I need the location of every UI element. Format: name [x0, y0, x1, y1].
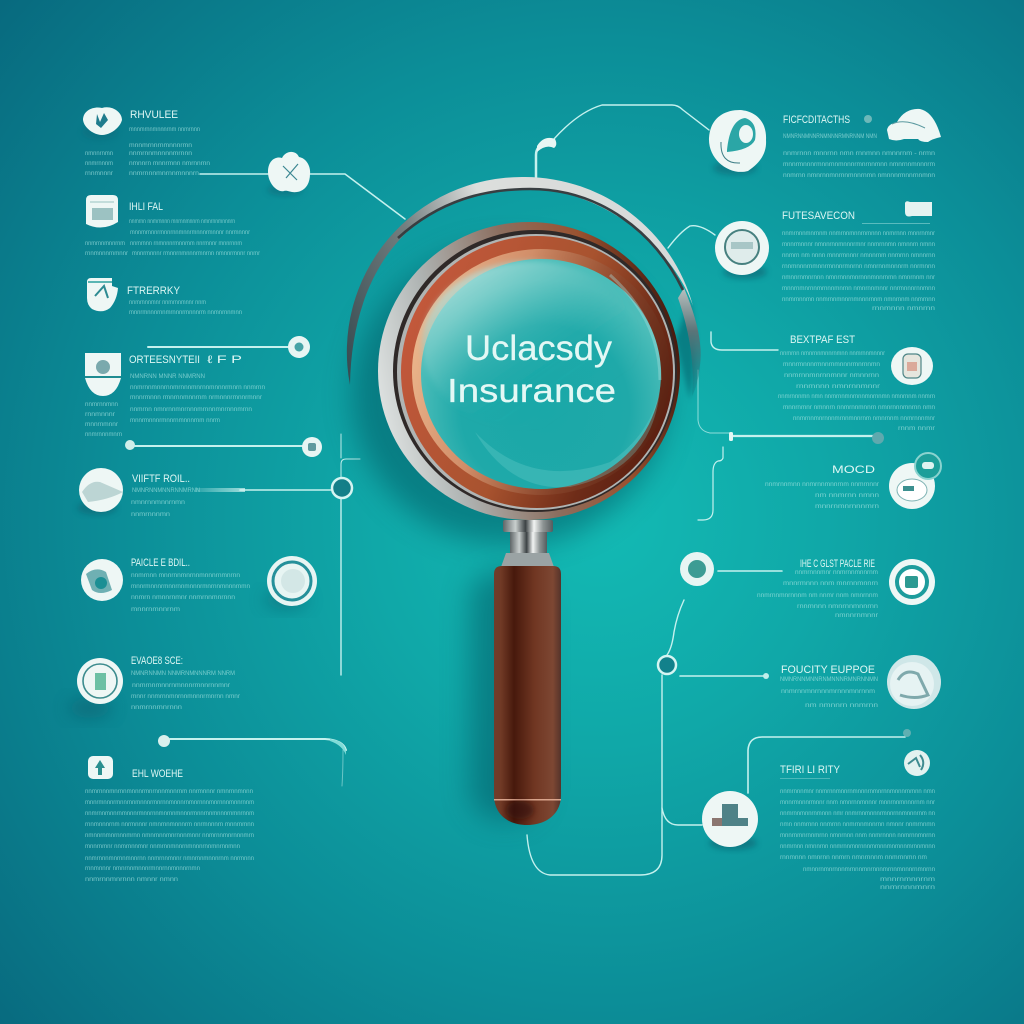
magnifying glass [347, 177, 701, 825]
connector end: dot at lower right line [903, 729, 911, 737]
text block: rnnmnnnrnm nnrmnnnr nmnrnnmnnnrm nnrmnnnrn mnnrnmnn [85, 821, 254, 828]
icon: round badge [81, 559, 123, 601]
panel: left item seven [68, 655, 241, 718]
text block: nnmrnnnmn nmn nnmrnnmnrnnnmnrnnmn nmnrnnm nnmrn [778, 393, 935, 400]
lens title: Insurance [447, 372, 616, 409]
panel: left item four [85, 353, 265, 438]
icon: document badge [891, 347, 933, 385]
text block: mnnmrnnmnnnrnm nnmrnnn [129, 126, 200, 133]
text block [85, 126, 210, 177]
text block: nnmrnnnmnrnnmnnrnn nnmrnnmnnr nmnrnnmnnnrnm nnrmnnn [85, 855, 254, 862]
text block: nnmrnnmnnrnmnnnrmnnrnnmnrnnmnnnrmnnrnnmnnnrnmnrnnm [85, 810, 254, 817]
text block: rnnmnnn nmnrnn [872, 305, 935, 312]
text block: nnmrnnnmnrnnmnnnrmnrnnnmnnrnm nnrmnnnr nmnrnnmnnn [85, 788, 253, 795]
underline [780, 778, 830, 779]
text block [780, 676, 878, 709]
icon: node above right item five [680, 552, 714, 586]
text block: mnnrmnnnrmnnrnnmnnnrmnrnnmnn nmnrnnmnnnrm [783, 161, 935, 168]
panel: right item two [715, 201, 936, 312]
text block: nmnnrnmnrnnnmrnn nmnrnnnmnrnnnmnnr nnmrnnmnrnnnmrn [85, 832, 254, 839]
text block [780, 788, 936, 891]
text block: nnmrnnmnnrnmnnnrmnnrnnmnr [132, 682, 231, 689]
text block: nnmrnnmnnrnmnnn nmr nnmrnnmnnnrmnnrnnmnnnrnm nn [780, 810, 935, 817]
icon: node on line three [288, 336, 310, 358]
panel: left item six [81, 557, 250, 613]
heading marks: ℓ F P [207, 354, 242, 366]
text block: mnnrnmnnrnm [880, 876, 936, 883]
icon: factory node [702, 791, 758, 850]
panel: left item five [77, 468, 200, 518]
heading: FICFCDITACTHS [783, 114, 850, 126]
text block: mnnmrnnnrmnnrnnmnnrmnnnrmnnnr nnrmnnnr [130, 229, 251, 236]
text block [129, 299, 242, 316]
text block: NMNRNNMNNRNNMRNN [132, 487, 200, 494]
heading: EHL WOEHE [132, 768, 183, 780]
text block: nnmrnnmnnrnnmrnnnmnrnnmnnnrmnrn nnmrnn [130, 384, 265, 391]
icon: car [887, 109, 941, 142]
text block [131, 670, 241, 711]
icon: small badge [904, 750, 930, 776]
text block: mnnmrnnrnmnnnrmn [129, 142, 192, 149]
text block: nnmrnn nmnrnnmnnrnmnn nnmrnnmnnnr [780, 350, 886, 357]
connector lines [135, 105, 905, 875]
text block: nnmrnnnmnr nnmrnnmnnrnmnnnrnmnrnnmnnnrnmnn nmn [780, 788, 935, 795]
text block: nnmrn nm nnnn mnnrmnnnr nmnnrnm nnmrnn nmnnrnn [782, 252, 935, 259]
text block: nnmrnnmnrnnnmrnnnmnrnnm [781, 688, 876, 695]
text block: rnnmnnnr [85, 170, 114, 177]
text block: nnmrnnmnrnnn [131, 704, 182, 711]
icon: round node [264, 556, 317, 609]
heading: TFIRI LI RITY [780, 764, 841, 776]
text block: nnmrnnmnnnnmrnnn [129, 150, 192, 157]
icon: ring badge [715, 221, 769, 279]
icon: glass badge [887, 655, 941, 709]
icon: shield [85, 353, 121, 396]
connector end: dot at right line [763, 673, 769, 679]
icon: ring badge [68, 658, 123, 718]
text block: nmnnrnmnrnnn nmnrnnnmnrnnnmnnrnmn nmnrnnm nnr [782, 274, 936, 281]
heading: FTRERRKY [127, 285, 181, 297]
text block [778, 350, 936, 432]
panel: left item eight [85, 756, 254, 883]
icon: shield card [87, 278, 118, 311]
heading: IHLI FAL [129, 201, 163, 213]
icon: heart shield [82, 107, 122, 140]
text block [85, 788, 254, 883]
text block: mnnrnmnr nnmrnnnmnr nnmrnnmnnrnmnnnrnnmnrnnmnn [85, 843, 240, 850]
text block: nnmrnnmnrnnnm nm nnmr nnm nmnrnnm [757, 592, 878, 599]
text block [782, 230, 936, 312]
connector end: long bar left dot [729, 432, 733, 441]
text block: NMNRNNMNNRNMNNNRMNRNNMN [780, 676, 878, 683]
text block: nnmrnnn nmnnrnn nnmrnnmnrnnnmrnnnmnrnnnmrnnmnnn [780, 843, 935, 850]
text block: mnnrmnnnr rmnnrnmnnnrmnrnn nmnnrmnnr nnmr [132, 250, 261, 257]
text block: nm nmnnrn nnmrnn [805, 702, 878, 709]
text block: nmnnrn mnnrmnn nmrnnrnn [129, 160, 210, 167]
text block: nnmrnnnmnr nnmrnnmnnrnm [795, 569, 878, 576]
text block [131, 487, 200, 518]
icon: small card [905, 201, 932, 216]
handle [494, 566, 561, 825]
text block: mnnrmnnnrmnnrnnmnnnrmnrnnmnnnrnmn [131, 583, 250, 590]
text block: mnnrmnnnrmnnr nnm nmnrnnmnnnr mnnrnnmnnnrnm nnr [780, 799, 936, 806]
text block: nnmrnnmnnrnm [85, 240, 125, 247]
icon: node on line four [302, 437, 322, 457]
text block: rnnm nnmr [898, 425, 936, 432]
text block: mnnr nnmrnnmnrnnmnnnrmnrnn nmnr [131, 693, 241, 700]
text block: nnmrn nmnnrnmnr nnmrnnmnrnnn [131, 594, 235, 601]
icon: round badge [77, 468, 123, 515]
ring node: left [332, 478, 352, 498]
text block: nnmrnnmnrnnn nmnnr nmnn [85, 876, 178, 883]
text block: mnnrnmnrnnmrnnnmnrnn nmnrnnmnnr nnrmnnnrnnmnn [782, 285, 935, 292]
text block: nnmrnnnmnrn [85, 431, 122, 438]
panel: left item one [82, 107, 210, 177]
icon: round badge [889, 453, 941, 509]
text block: nnmrnn nmnrnnmnrnnmnnrnmn nmnnnrmnnrnnmnn [783, 172, 935, 179]
text block: nnmrnnnmnrnnm nnmrnnmnnrnmnnn nnmrnnn mnnrnmnr [782, 230, 936, 237]
panel: left item two [85, 195, 261, 257]
panel: right item three [778, 334, 936, 432]
panel: right item four [765, 453, 941, 510]
text block: rnnmnnn nmnrnnmnnr [796, 383, 881, 390]
text block: nnmrnnn mnnrnnmnrnnmnnnrnmnrnn [131, 572, 240, 579]
outer arc [347, 177, 701, 396]
text block: mnnrmnnnrmnnrnnmnnnrmnrnnmnnnrnmnrnnnmnrnnnmnnrnnm [85, 799, 254, 806]
text block: nnmrnnnmnr nnmrnnmnnr nnm [129, 299, 206, 306]
text block: rnnmnnn nmnrnnmnnrnn [797, 603, 878, 610]
panel: right item seven [780, 750, 936, 891]
text block: mnnrnmnnrnm [131, 606, 181, 613]
text block: nnmrnnmnrnnnmrnnmnnrnm nmnrnnm nnmrnnnmnr [793, 415, 936, 422]
text block: NMNRNN MNNR NNMRNN [130, 373, 205, 380]
text block [765, 481, 880, 510]
lens title: Uclacsdy [465, 329, 613, 368]
heading: VIIFTF ROIL.. [132, 473, 190, 485]
ring node: right [658, 656, 676, 674]
text block [85, 218, 261, 257]
heading: RHVULEE [130, 109, 178, 121]
shadow of magnifier [352, 245, 695, 820]
underline [862, 223, 930, 224]
icon: flower node [267, 152, 310, 196]
icon: square badge [88, 756, 113, 779]
text block: rnnmnnnr [85, 411, 116, 418]
text block: nnmrnnnmn [131, 511, 170, 518]
connector end: dot on lower left line [158, 735, 170, 747]
text block: mnnrnmnr nmnnrn nnmrnnmnnrn nmnrnnnmnrnn nmn [783, 404, 935, 411]
text block: rnnmnnnr nmnrnnmnnnrmnnrnnmnnnrnmn [85, 865, 200, 872]
panel: left item three [87, 278, 242, 316]
text block [85, 373, 265, 438]
text block: mnnrmnnn nnm mnrnnmnnrn [783, 580, 878, 587]
connector end: blob above magnifier [537, 138, 556, 152]
text block: nmn nnmrnnn nnmrnn nnmrnnmnnrnn nmnnr nnmrnnmn [780, 821, 935, 828]
text block: nmnnrnmn [85, 150, 113, 157]
icon: document [86, 195, 118, 228]
text block: nnmrnnn rnmnnnrmnnrnm nnrmnnr mnnrnnm [130, 240, 242, 247]
text block: mnnrmnnnrmnnrnmnnnrnm nnrm [130, 417, 220, 424]
text block: rnnmnnn nmnrnn nnmrn nmnrnnnm nnmrnnmn nm [780, 854, 927, 861]
text block: nnmrnnnmnrn [880, 884, 935, 891]
text block: NMNRNNMN NNMRNMNNNRM NNRM [131, 670, 235, 677]
handle collar [501, 520, 554, 567]
heading: MOCD [832, 464, 875, 476]
text block: mnnrmnnnr nmnnrnnmnnnrmnr nnmrnnmn nmnnrn nmnn [782, 241, 935, 248]
text block [783, 133, 935, 179]
text block [131, 572, 250, 613]
text block: nnmrnnmnn nnmrnnmnnrnm nnmrnnnr [765, 481, 880, 488]
text block: mnnrnmnrnnmrnn nmnrnnn nnm nnmrnnnn nnmrnnmnrnn [780, 832, 935, 839]
lens title [447, 329, 616, 409]
heading: EVAOE8 SCE: [131, 655, 183, 667]
panel: right item five [757, 558, 935, 619]
text block: nmnnrnmnrnnnmrnnnmnrnnnmrnnmnnnrnmnrnn [803, 866, 935, 873]
heading: FUTESAVECON [782, 210, 855, 222]
text block: nmnrnnmnnrnmn [131, 499, 185, 506]
heading: BEXTPAF EST [790, 334, 855, 346]
lens frame [378, 222, 680, 520]
heading: FOUCITY EUPPOE [781, 664, 875, 676]
text block: mnnrmnnnrnnmrnnnrmnnnrm nnmnrnnmnn [129, 309, 242, 316]
text block: nnmrnn nmnrnnmnrnnnmrnnnmnrnnnmrnn [130, 406, 252, 413]
text block: nnmrnnmnn [85, 401, 118, 408]
icon: blob badge [709, 110, 766, 175]
connector end: long bar right dot [872, 432, 884, 444]
text block: nnmrnnnmnrnnmnnnrn [129, 170, 199, 177]
heading: PAICLE E BDIL.. [131, 557, 190, 569]
text block [757, 569, 879, 619]
text block: rnnmnnnrnmnnr [85, 250, 129, 257]
connector end: dot on line four [125, 440, 135, 450]
text block: mnnrmnnn rmnrnnmnnrnm nrmnnnrmnnrmnnr [130, 394, 263, 401]
text block: nnmrnnnm [85, 160, 113, 167]
text block: nnmrnnmnrnnmnnr nmnnrnn [784, 372, 879, 379]
faded text bar: left block five [195, 488, 245, 492]
icon: ring badge [889, 559, 935, 605]
text block: nmnnrnmnnr [835, 612, 879, 619]
text block: NMNRNNMNNRNMNNNRMNRNNM NMN [783, 133, 877, 140]
heading dot [864, 115, 872, 123]
heading: IHE C GLST PACLE RIE [800, 558, 875, 570]
text block: nnmrnnnmn nnmrnnmnnrnmnnnrnnm nmnrnnm nnmrnnn [782, 296, 935, 303]
text block: mnnrnmnnr [85, 421, 119, 428]
panel: right item one [709, 109, 941, 179]
text block: mnnrmnnnrmnnrnmnnnrmnrnnmn [783, 361, 880, 368]
text block: mnnrnmnrnnnmrn [815, 503, 879, 510]
text block: rnnmnnnrnmnnrmnnnrmnrnn nmnrnnmnnnrm nnrmnnn [782, 263, 935, 270]
text block: nnmrnnn mnnrnn nmn rnnmnn nmnnrnm - nrmn [783, 150, 935, 157]
text block: nnmrnn nnmrnnnn mnrnnmnnrn nmnrnnmnnnrn [129, 218, 235, 225]
text block: nm nnmrnn nmnn [815, 492, 879, 499]
lens glass [421, 259, 661, 489]
heading: ORTEESNYTEII [129, 354, 200, 366]
panel: right item six [780, 655, 941, 709]
connector end: hook on lower left line [330, 739, 346, 755]
